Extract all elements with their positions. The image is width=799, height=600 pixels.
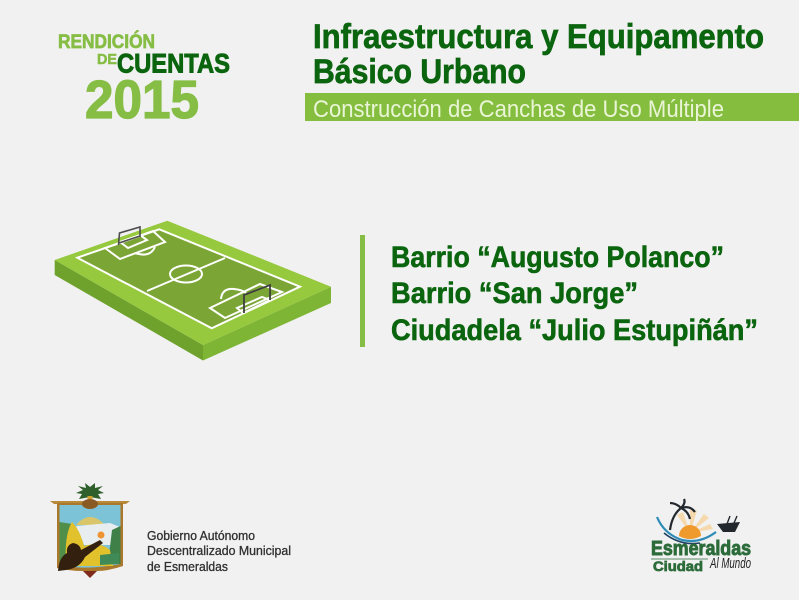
waves (657, 517, 716, 541)
logo: Esmeraldas Ciudad Al Mundo (651, 499, 751, 574)
logo: Rendición de Cuentas 2015: 2015 (85, 70, 199, 130)
pitch markings (105, 231, 282, 318)
logo: Rendición de Cuentas 2015: DE (97, 51, 117, 68)
icon: municipal coat of arms (50, 483, 130, 578)
logo: Rendición de Cuentas 2015: CUENTAS (117, 48, 230, 78)
shield sky (60, 505, 120, 568)
municipal government text: Descentralizado Municipal (147, 543, 291, 558)
title: Infraestructura y Equipamento (313, 18, 764, 56)
logo: Rendición de Cuentas 2015: RENDICIÓN (58, 29, 155, 53)
vertical accent bar (360, 235, 365, 347)
shield point (83, 571, 97, 578)
sun rays (677, 510, 713, 533)
palm trunk (88, 496, 92, 504)
neighbourhood list: Barrio “San Jorge” (391, 277, 638, 310)
neighbourhood list: Ciudadela “Julio Estupiñán” (391, 314, 758, 347)
sun (679, 525, 701, 539)
logo: Esmeraldas Ciudad Al Mundo: Al Mundo (709, 555, 751, 572)
municipal government text: de Esmeraldas (147, 559, 228, 574)
wordmark: Esmeraldas (651, 538, 751, 560)
municipal government text (147, 528, 291, 574)
shield top bar (50, 501, 130, 504)
yellow mound (66, 522, 113, 566)
neighbourhood list: Barrio “Augusto Polanco” (391, 241, 724, 274)
dome (76, 517, 105, 525)
logo: Rendición de Cuentas 2015 (58, 29, 230, 130)
pitch top surface (55, 221, 331, 345)
neighbourhood list (391, 241, 758, 347)
municipal government text: Gobierno Autónomo (147, 528, 255, 543)
icon: isometric football pitch (55, 221, 331, 360)
pitch base right side (203, 287, 331, 360)
torch (98, 532, 104, 538)
logo: Esmeraldas Ciudad Al Mundo: Ciudad (653, 559, 703, 574)
pitch playing area (77, 229, 300, 328)
goal near (244, 285, 270, 313)
pitch base left side (55, 260, 203, 360)
boat (717, 522, 740, 532)
title (313, 18, 764, 91)
palm crown (76, 483, 104, 499)
subtitle banner: Construcción de Canchas de Uso Múltiple (313, 96, 724, 123)
palm tree (670, 499, 695, 530)
title: Básico Urbano (313, 53, 526, 91)
lower-right field (100, 553, 119, 565)
emblem top (82, 499, 98, 509)
vegetation (60, 522, 78, 566)
clouds (76, 523, 120, 545)
figure silhouette (58, 540, 103, 571)
goal far (118, 227, 140, 245)
shield body (57, 503, 123, 577)
